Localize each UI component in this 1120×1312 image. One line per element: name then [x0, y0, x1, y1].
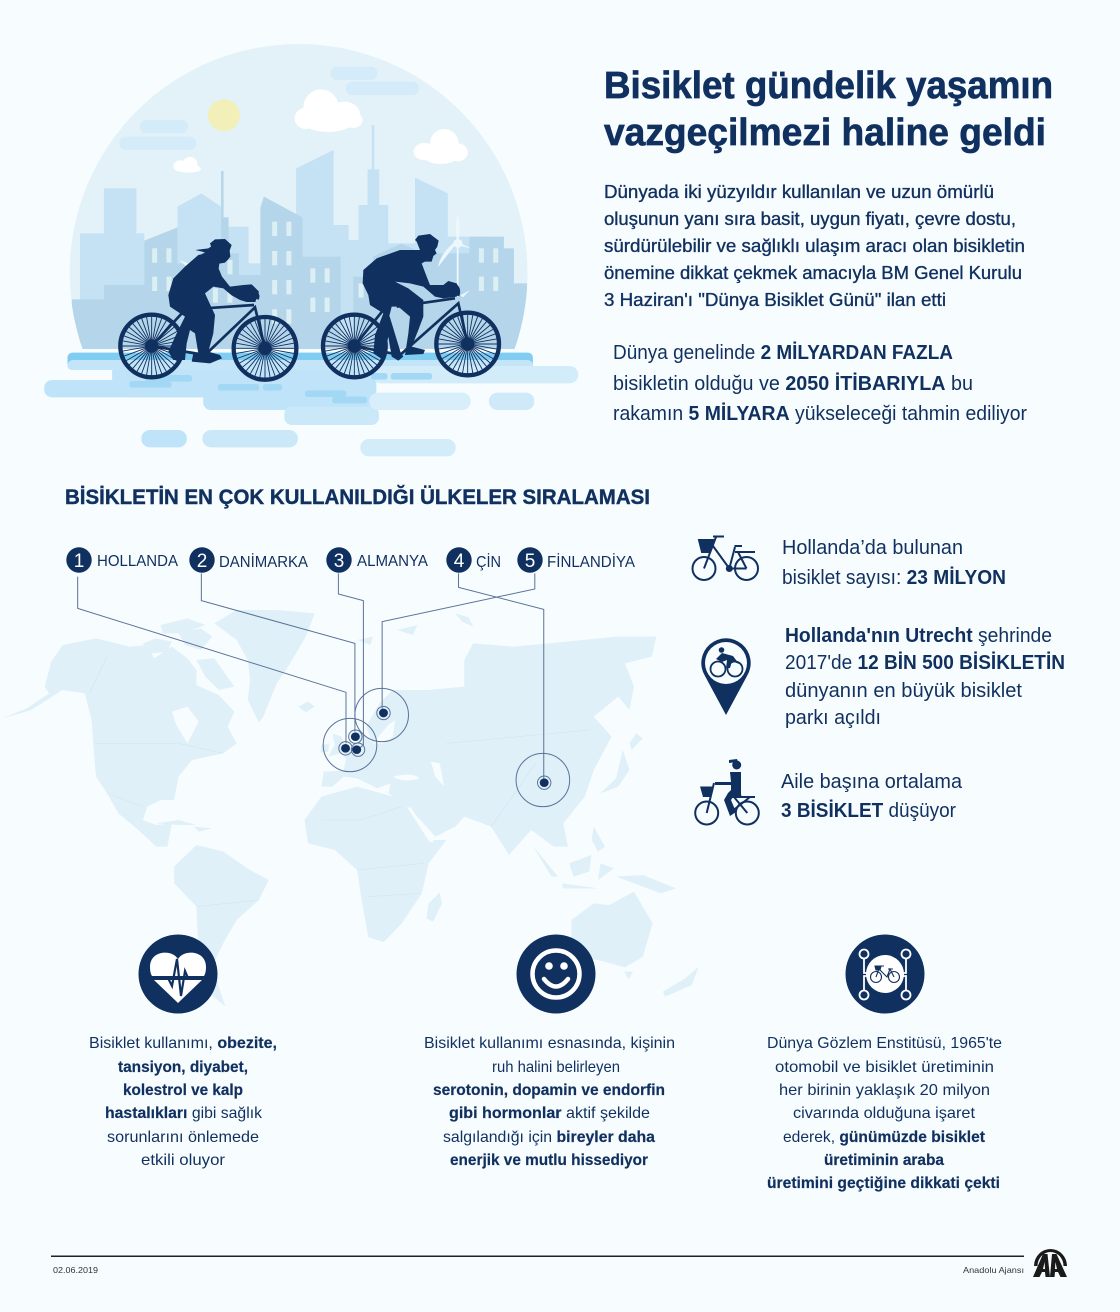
stat: bicycles per family: 3 BİSİKLET düşüyor	[781, 799, 956, 822]
text: mood benefits: ruh halini belirleyen	[492, 1059, 620, 1076]
text: production comparison: üretiminin araba	[824, 1152, 944, 1169]
sun	[208, 99, 240, 131]
text: mood benefits: gibi hormonlar aktif şekilde	[449, 1105, 650, 1122]
intro paragraph: Dünyada iki yüzyıldır kullanılan ve uzun ömürlü	[604, 182, 994, 202]
icon: city bicycle with basket	[692, 536, 758, 580]
road stripes	[44, 353, 578, 456]
stat: Utrecht bicycle park: Hollanda'nın Utrecht şehrinde	[785, 625, 1052, 647]
country ranking legend: 2	[197, 551, 207, 572]
sky circle	[70, 44, 528, 304]
title	[604, 65, 1053, 154]
country ranking legend: FİNLANDİYA	[547, 552, 635, 571]
text: production comparison: otomobil ve bisiklet üretiminin	[775, 1059, 994, 1076]
key fact paragraph: rakamın 5 MİLYARA yükseleceği tahmin ediliyor	[613, 402, 1027, 425]
text: mood benefits: enerjik ve mutlu hissediyor	[450, 1152, 648, 1169]
key fact paragraph: Dünya genelinde 2 MİLYARDAN FAZLA	[613, 341, 953, 364]
country ranking legend: DANİMARKA	[219, 552, 308, 571]
text: mood benefits: serotonin, dopamin ve endorfin	[433, 1082, 665, 1099]
windows	[152, 222, 498, 324]
country ranking legend: ALMANYA	[357, 553, 428, 570]
intro paragraph: sürdürülebilir ve sağlıklı ulaşım aracı olan bisikletin	[604, 236, 1025, 256]
country ranking legend: 1	[74, 551, 84, 572]
text: health benefits: tansiyon, diyabet,	[118, 1059, 248, 1076]
illustration: city scene	[44, 44, 578, 502]
intro paragraph: önemine dikkat çekmek amacıyla BM Genel Kurulu	[604, 263, 1022, 283]
cyclist: woman	[120, 239, 296, 380]
text: mood benefits	[424, 1035, 675, 1169]
stat: bicycles in the Netherlands: bisiklet sayısı: 23 MİLYON	[782, 566, 1006, 589]
stat: Utrecht bicycle park: 2017'de 12 BİN 500 BİSİKLETİN	[785, 651, 1065, 674]
icon: cyclist with basket bicycle	[695, 759, 759, 824]
text: health benefits	[89, 1035, 277, 1169]
cyclist: man	[323, 234, 499, 377]
icon: heart with pulse	[138, 934, 218, 1014]
text: health benefits: kolestrol ve kalp	[123, 1082, 243, 1099]
text: health benefits: hastalıkları gibi sağlık	[105, 1105, 263, 1122]
country ranking legend	[66, 547, 635, 573]
text: production comparison: civarında olduğuna işaret	[793, 1105, 976, 1122]
wind turbine	[179, 213, 471, 297]
country ranking legend: ÇİN	[476, 552, 501, 571]
intro paragraph: 3 Haziran'ı "Dünya Bisiklet Günü" ilan etti	[604, 290, 946, 310]
country borders	[89, 657, 589, 907]
ranking heading: BİSİKLETİN EN ÇOK KULLANILDIĞI ÜLKELER SIRALAMASI	[65, 485, 650, 509]
text: production comparison	[767, 1035, 1002, 1192]
text: production comparison: ederek, günümüzde bisiklet	[783, 1129, 986, 1146]
text: production comparison: Dünya Gözlem Enstitüsü, 1965'te	[767, 1035, 1002, 1052]
country ranking legend: 4	[454, 551, 465, 572]
skyline	[72, 125, 527, 349]
title: vazgeçilmezi haline geldi	[604, 112, 1046, 154]
intro paragraph: oluşunun yanı sıra basit, uygun fiyatı, çevre dostu,	[604, 209, 1016, 229]
icon: smiley	[516, 934, 596, 1014]
text: health benefits: Bisiklet kullanımı, obezite,	[89, 1035, 277, 1052]
world map	[2, 610, 699, 1007]
footer: Anadolu Ajansı	[963, 1265, 1024, 1275]
stat: bicycles in the Netherlands	[782, 537, 1006, 589]
intro paragraph	[604, 182, 1025, 310]
country ranking legend: 5	[525, 551, 535, 572]
stat: Utrecht bicycle park: parkı açıldı	[785, 707, 881, 729]
stat: Utrecht bicycle park: dünyanın en büyük bisiklet	[785, 680, 1022, 702]
stat: bicycles in the Netherlands: Hollanda’da bulunan	[782, 537, 963, 559]
logo: AA	[1033, 1249, 1067, 1277]
text: health benefits: sorunlarını önlemede	[107, 1129, 259, 1146]
text: mood benefits: Bisiklet kullanımı esnasında, kişinin	[424, 1035, 675, 1052]
key fact paragraph: bisikletin olduğu ve 2050 İTİBARIYLA bu	[613, 372, 973, 395]
sky stripes	[119, 67, 419, 150]
text: production comparison: üretimini geçtiğine dikkati çekti	[767, 1175, 1000, 1192]
stat: Utrecht bicycle park	[785, 625, 1065, 729]
clouds	[174, 89, 468, 173]
title: Bisiklet gündelik yaşamın	[604, 65, 1053, 107]
stat: bicycles per family: Aile başına ortalama	[781, 771, 963, 793]
map connector lines	[78, 573, 544, 778]
text: health benefits: etkili oluyor	[141, 1152, 226, 1169]
stat: bicycles per family	[781, 771, 963, 822]
footer: 02.06.2019	[53, 1265, 98, 1275]
key fact paragraph	[613, 341, 1027, 425]
icon: location pin with cyclist	[701, 638, 751, 715]
country ranking legend: HOLLANDA	[97, 553, 178, 570]
icon: bicycle production diagram	[846, 934, 924, 1014]
text: production comparison: her birinin yaklaşık 20 milyon	[779, 1082, 990, 1099]
country ranking legend: 3	[334, 551, 344, 572]
text: mood benefits: salgılandığı için bireyler daha	[443, 1129, 655, 1146]
map markers	[323, 688, 570, 807]
footer	[51, 1249, 1067, 1277]
